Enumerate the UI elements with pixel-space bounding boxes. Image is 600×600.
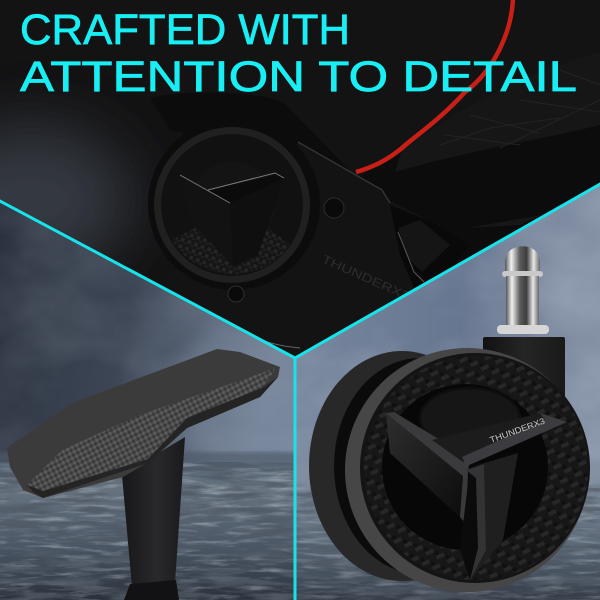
panel: chair detail scene, top xyxy=(0,0,600,360)
wheel brand text: THUNDERX3 xyxy=(488,416,546,445)
panel: caster wheel scene, bottom right xyxy=(285,180,600,600)
quilted seat xyxy=(440,70,600,148)
hub logo xyxy=(180,173,284,267)
smoky backdrop xyxy=(295,180,600,490)
panel: armrest scene, bottom left xyxy=(0,195,306,600)
title: ATTENTION TO DETAIL xyxy=(20,53,577,101)
concrete floor xyxy=(285,462,600,600)
front wheel xyxy=(345,348,590,592)
side plate xyxy=(266,142,450,348)
smoky wall background xyxy=(0,202,294,462)
concrete floor xyxy=(0,452,306,600)
plate screws xyxy=(228,198,344,302)
cyan divider lines xyxy=(0,183,600,600)
wheel post xyxy=(483,337,565,396)
title: CRAFTED WITH xyxy=(20,6,350,54)
dark backdrop xyxy=(0,97,152,266)
plate brand text: THUNDERX3 xyxy=(320,252,413,304)
backrest wing xyxy=(150,93,350,170)
chrome stem xyxy=(497,246,549,334)
red cable xyxy=(356,0,513,172)
armrest post xyxy=(122,437,185,600)
hub disc xyxy=(148,127,310,283)
armrest pad xyxy=(7,349,280,498)
wheel logo blades xyxy=(386,412,567,580)
title xyxy=(20,6,577,101)
rear wheel xyxy=(309,351,426,581)
